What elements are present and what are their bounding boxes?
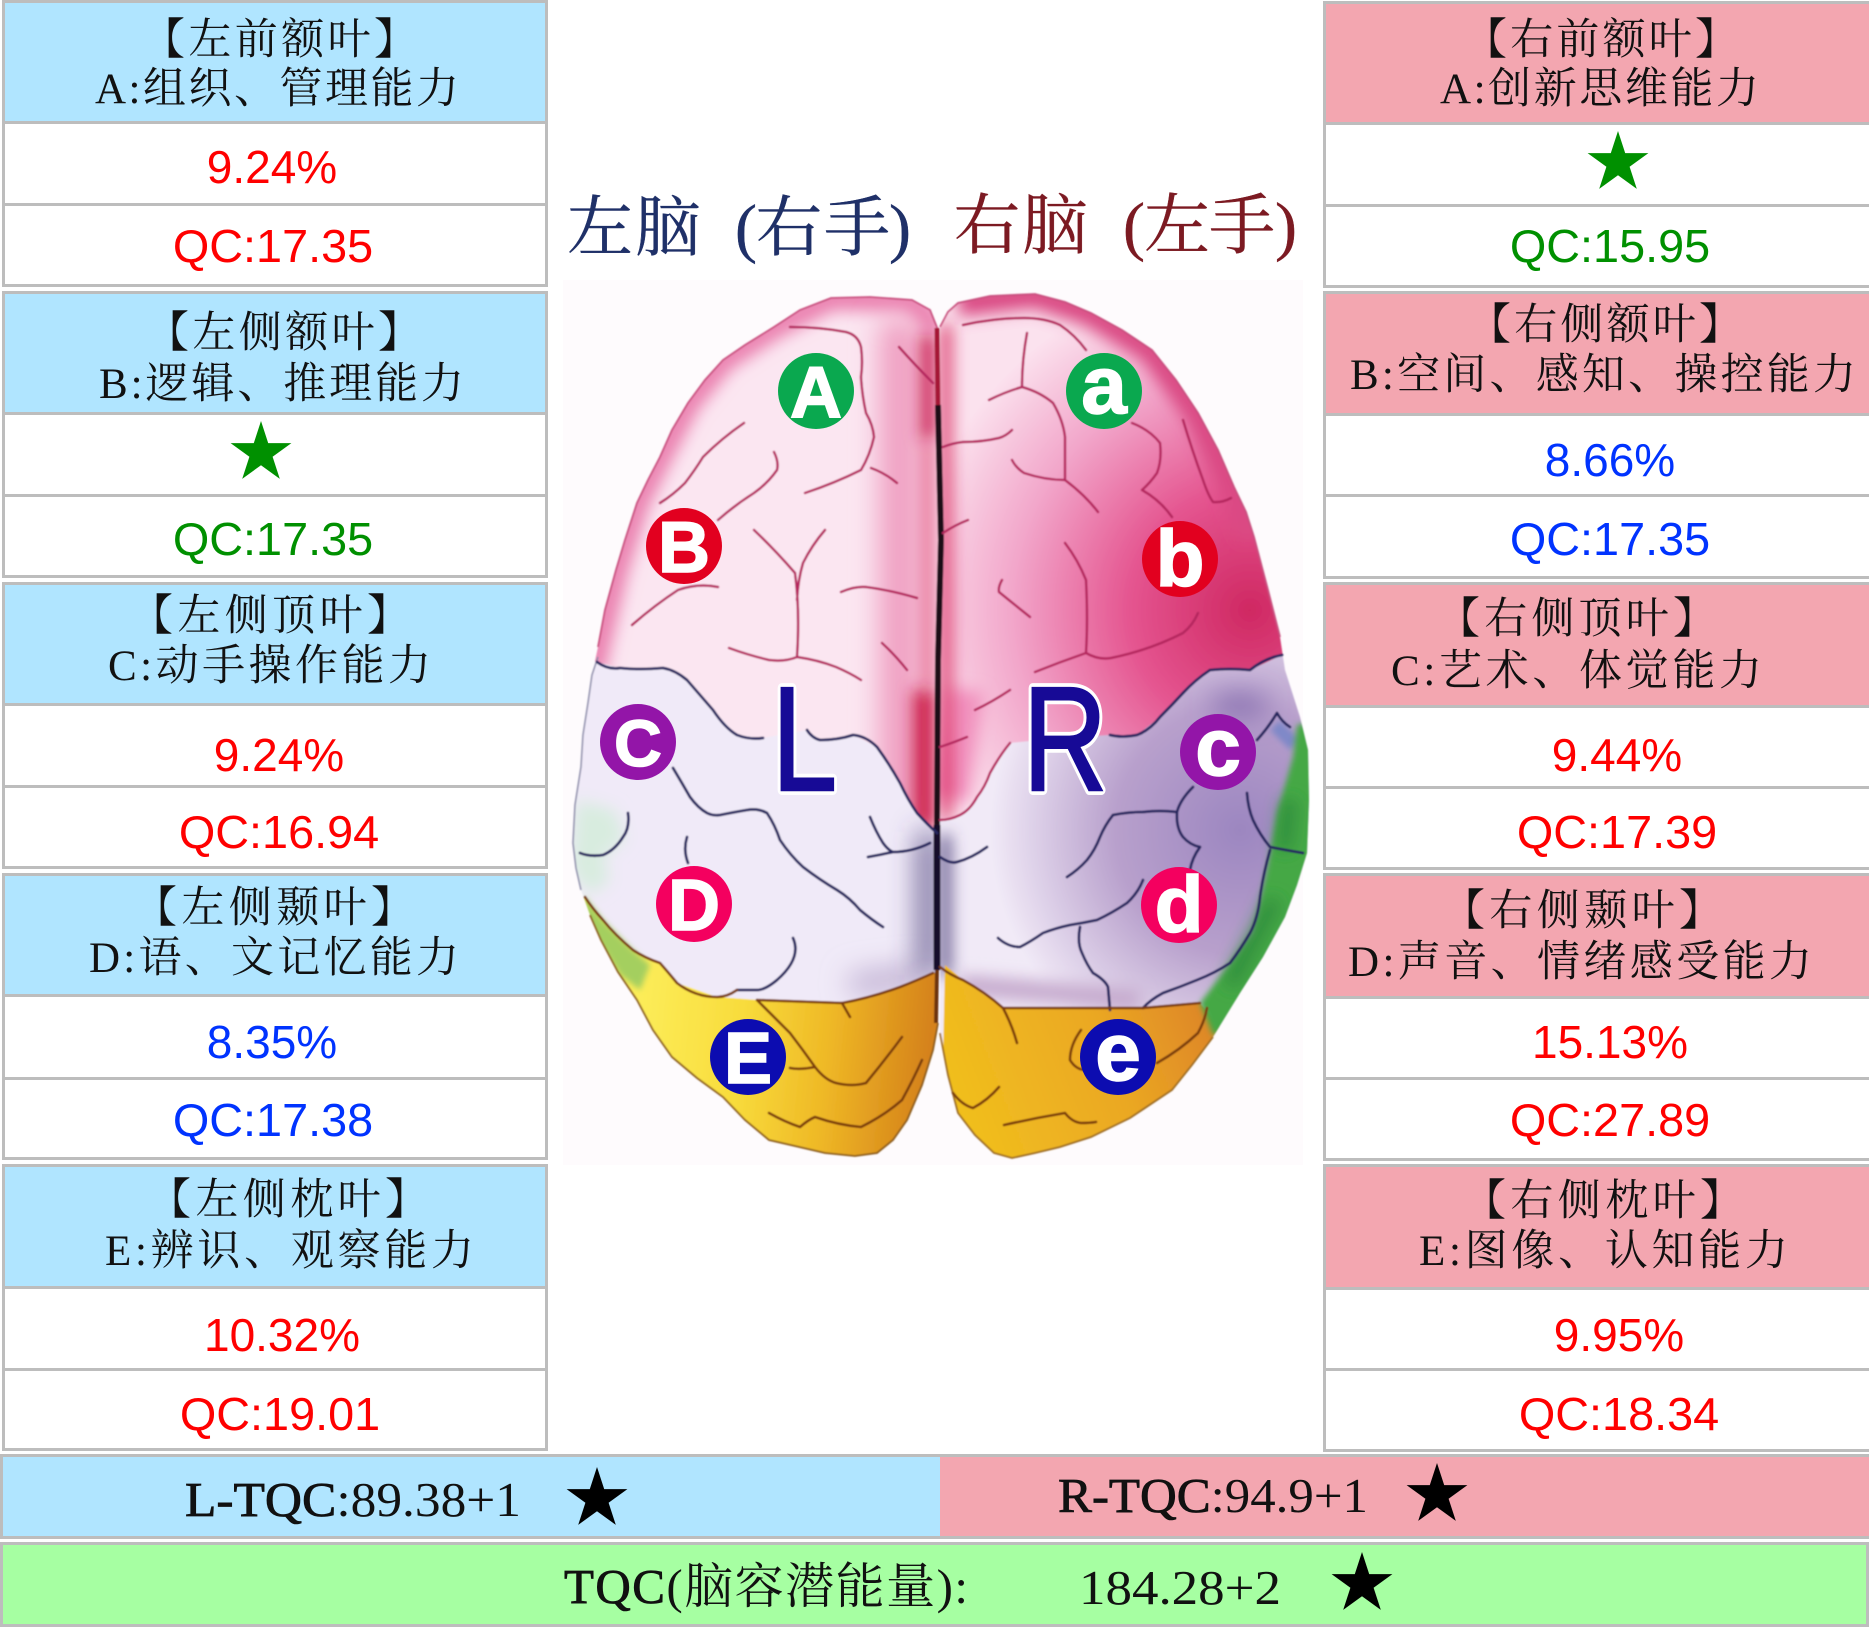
marker b: b xyxy=(1156,514,1204,603)
value: QC: QC:16.94 xyxy=(179,806,379,858)
panel: right lateral frontal B xyxy=(1324,292,1869,578)
marker e: e xyxy=(1095,1007,1141,1098)
brain illustration xyxy=(560,280,1330,1200)
icon: black star total xyxy=(1332,1552,1392,1610)
title: left brain: 左脑(右手) xyxy=(567,192,911,265)
marker b xyxy=(1142,514,1218,603)
text: right occipital ability: E:图像、认知能力 xyxy=(1419,1227,1788,1275)
marker B: B xyxy=(658,508,710,588)
value: percent: 9.24% xyxy=(207,141,337,193)
value: percent: 8.35% xyxy=(207,1016,337,1068)
text: left parietal ability: C:动手操作能力 xyxy=(108,642,431,690)
heading: left temporal: 【左侧颞叶】 xyxy=(134,885,414,932)
panel: left parietal C xyxy=(4,584,546,868)
panel: right frontal A xyxy=(1324,2,1869,286)
marker A: A xyxy=(790,353,842,433)
occipital folds xyxy=(757,1000,1207,1127)
value: QC: QC:15.95 xyxy=(1510,220,1710,272)
panel: left occipital E xyxy=(4,1166,546,1450)
marker e xyxy=(1080,1007,1156,1098)
text: right frontal ability: A:创新思维能力 xyxy=(1440,65,1759,113)
value: QC: QC:17.38 xyxy=(173,1094,373,1146)
occipital boundary xyxy=(585,897,1200,1008)
panel: left temporal D xyxy=(4,874,546,1158)
text: TQC value: 184.28+2 xyxy=(1079,1560,1281,1615)
text: right lateral frontal ability: B:空间、感知、操控能力 xyxy=(1350,351,1856,399)
heading: left lateral frontal: 【左侧额叶】 xyxy=(146,309,421,357)
value: QC: QC:19.01 xyxy=(180,1388,380,1440)
panel: left frontal A xyxy=(4,2,546,286)
value: percent: 9.24% xyxy=(214,729,344,781)
panel: right temporal D xyxy=(1324,874,1869,1160)
value: percent: 8.66% xyxy=(1545,434,1675,486)
text: R-TQC: R-TQC:94.9+1 xyxy=(1058,1468,1368,1523)
value: percent: 9.44% xyxy=(1552,729,1682,781)
panel: left lateral frontal B xyxy=(4,292,546,576)
icon: green star xyxy=(231,421,291,479)
text: left occipital ability: E:辨识、观察能力 xyxy=(105,1227,474,1275)
total bar: left and right xyxy=(0,1454,1869,1539)
text: right parietal ability: C:艺术、体觉能力 xyxy=(1391,647,1762,695)
text: TQC label: TQC(脑容潜能量): xyxy=(564,1559,968,1614)
value: QC: QC:27.89 xyxy=(1510,1094,1710,1146)
marker C: C xyxy=(614,706,662,780)
marker D: D xyxy=(668,866,720,946)
brain outline xyxy=(598,297,938,647)
letter L: L xyxy=(772,657,837,822)
frontal folds xyxy=(632,327,933,680)
central sulcus xyxy=(597,662,937,833)
panel: right occipital E xyxy=(1324,1166,1869,1450)
title: right brain: 右脑(左手) xyxy=(954,190,1297,263)
heading: right lateral frontal: 【右侧额叶】 xyxy=(1468,301,1742,349)
value: QC: QC:17.35 xyxy=(173,220,373,272)
letter L: L xyxy=(772,657,837,822)
marker c: c xyxy=(1195,702,1241,793)
marker E xyxy=(710,1019,786,1099)
heading: right temporal: 【右侧颞叶】 xyxy=(1442,888,1722,935)
marker c xyxy=(1180,702,1256,793)
letter R: R xyxy=(1023,657,1107,822)
value: QC: QC:17.35 xyxy=(1510,513,1710,565)
text: left temporal ability: D:语、文记忆能力 xyxy=(89,934,459,982)
value: QC: QC:18.34 xyxy=(1519,1388,1719,1440)
value: percent: 10.32% xyxy=(204,1309,360,1361)
heading: left frontal: 【左前额叶】 xyxy=(142,16,417,64)
parietal and temporal folds xyxy=(580,713,1303,1010)
heading: right parietal: 【右侧顶叶】 xyxy=(1437,596,1716,643)
marker A xyxy=(778,353,854,433)
heading: left parietal: 【左侧顶叶】 xyxy=(130,593,410,640)
icon: black star left xyxy=(567,1467,627,1525)
heading: left occipital: 【左侧枕叶】 xyxy=(148,1177,428,1224)
heading: right frontal: 【右前额叶】 xyxy=(1464,16,1738,64)
marker d: d xyxy=(1155,860,1203,949)
heading: right occipital: 【右侧枕叶】 xyxy=(1463,1178,1743,1225)
midline fissure xyxy=(937,328,938,410)
value: QC: QC:17.35 xyxy=(173,513,373,565)
text: L-TQC: L-TQC:89.38+1 xyxy=(185,1472,521,1527)
marker B xyxy=(646,508,722,588)
letter R: R xyxy=(1023,657,1107,822)
icon: green star xyxy=(1588,131,1648,189)
text: right temporal ability: D:声音、情绪感受能力 xyxy=(1348,938,1812,986)
marker d xyxy=(1141,860,1217,949)
value: percent: 9.95% xyxy=(1554,1309,1684,1361)
image background tint xyxy=(563,280,1303,1165)
text: left lateral frontal ability: B:逻辑、推理能力 xyxy=(99,360,464,408)
marker a: a xyxy=(1081,340,1128,431)
total bar: combined xyxy=(0,1542,1869,1627)
icon: black star right xyxy=(1407,1463,1467,1521)
value: QC: QC:17.39 xyxy=(1517,806,1717,858)
marker a xyxy=(1066,340,1142,431)
marker E: E xyxy=(724,1019,772,1099)
text: left frontal ability: A:组织、管理能力 xyxy=(95,65,459,113)
panel: right parietal C xyxy=(1324,584,1869,868)
value: percent: 15.13% xyxy=(1532,1016,1688,1068)
marker D xyxy=(656,866,732,946)
marker C xyxy=(600,704,676,780)
